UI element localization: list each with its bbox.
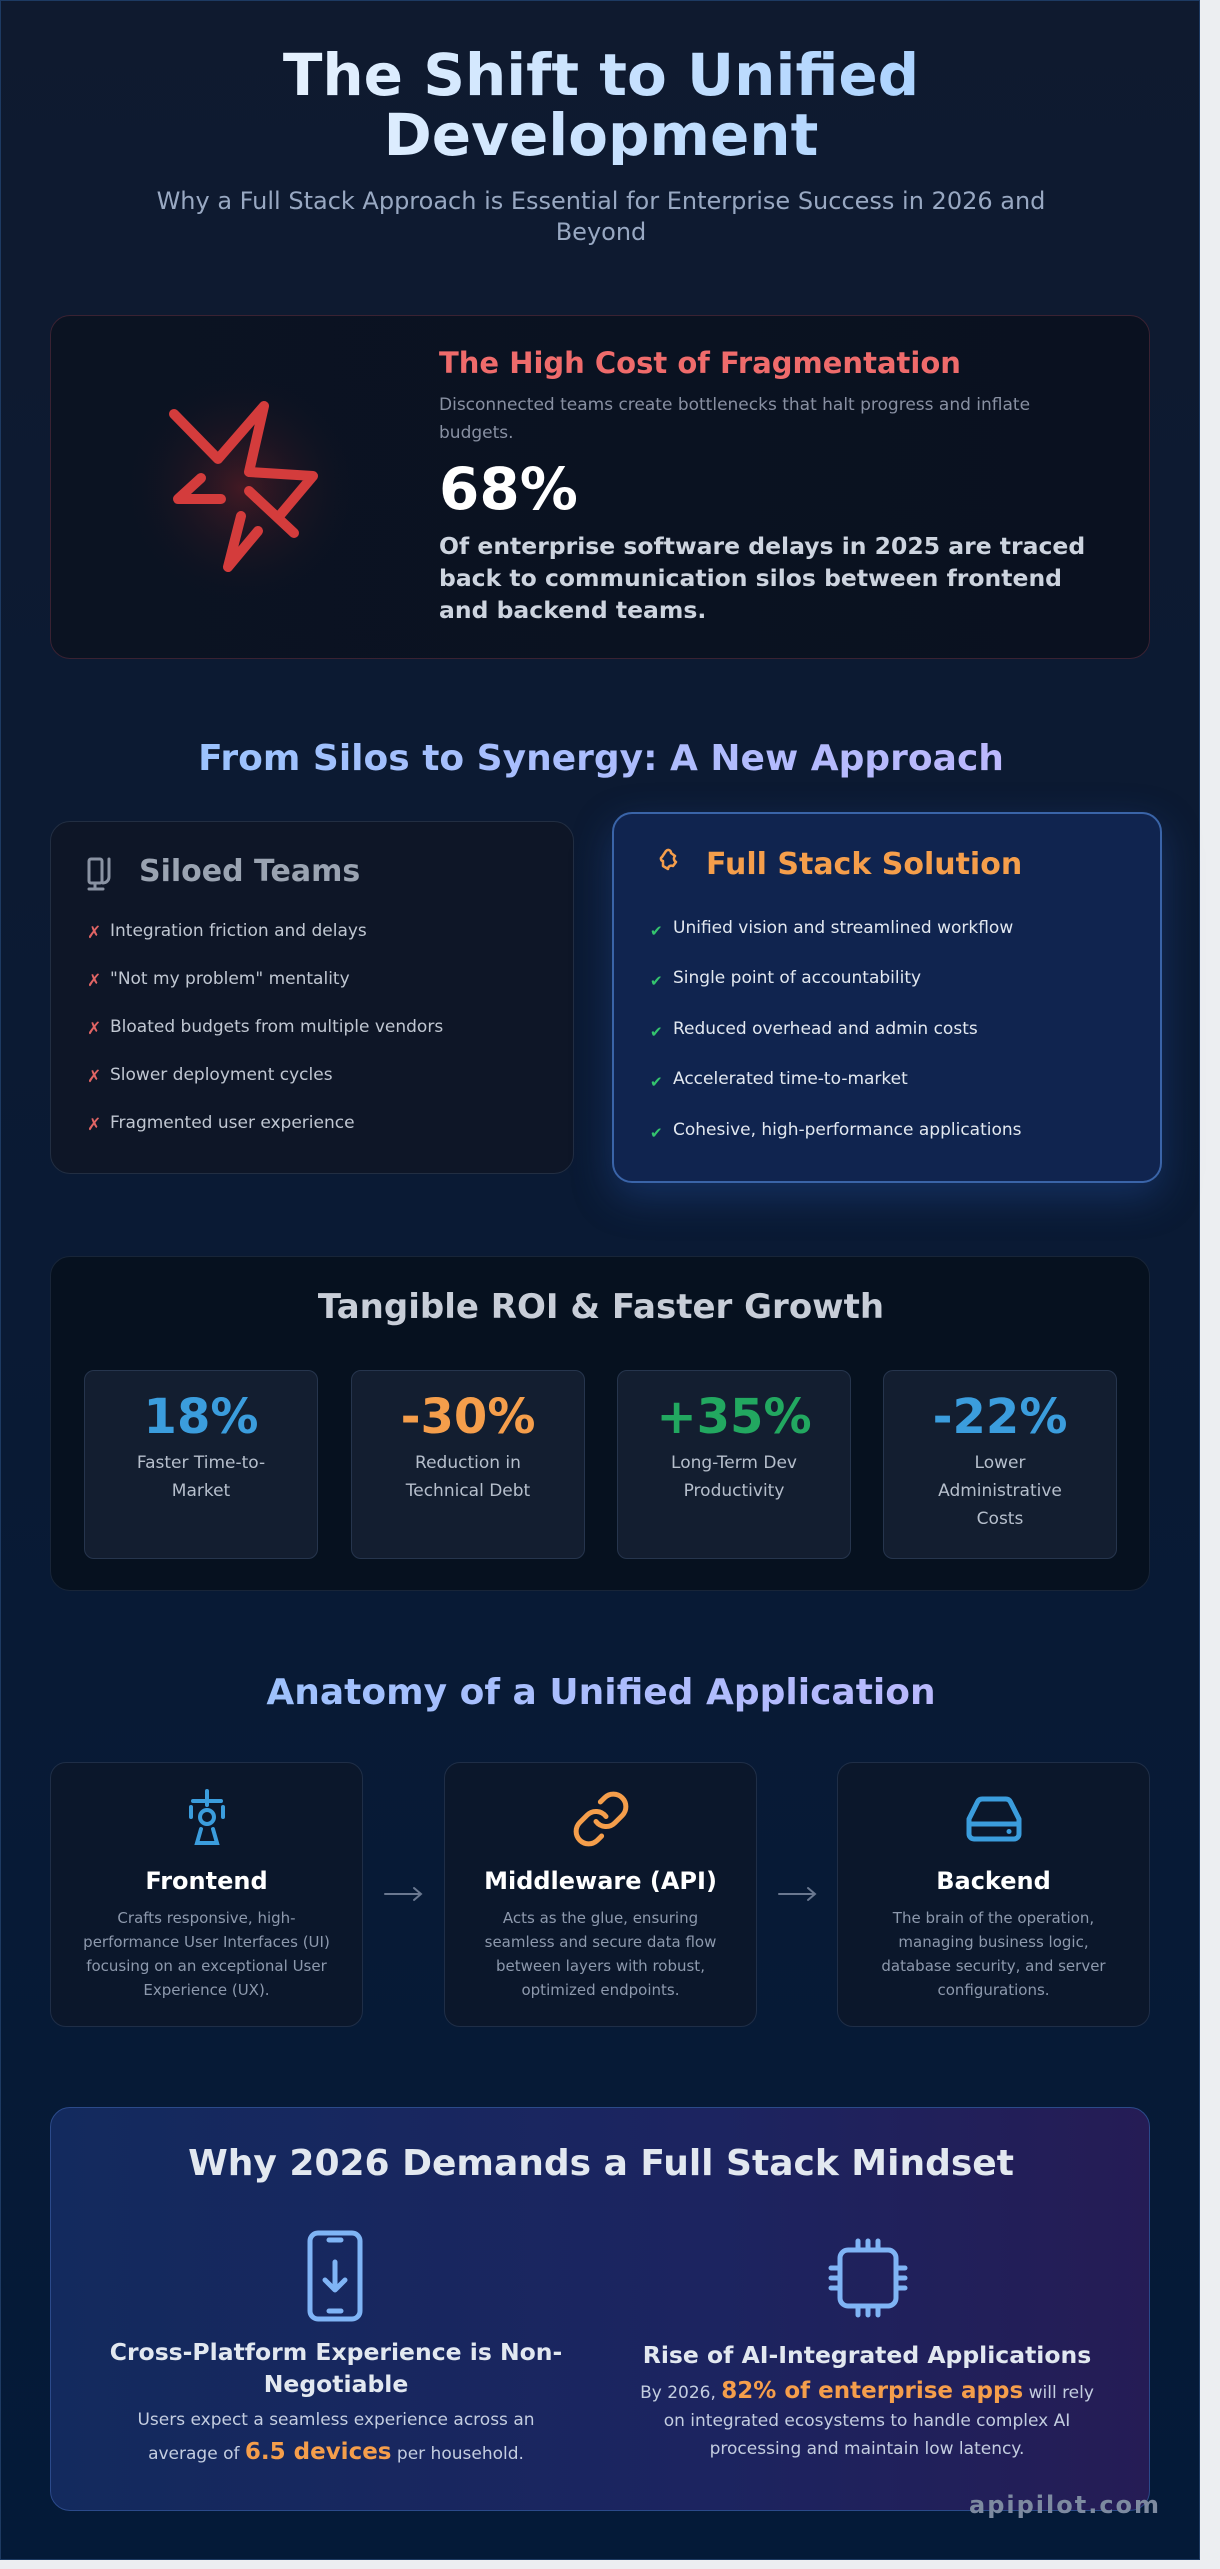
stat: -22%: [883, 1370, 1117, 1559]
text: AI: By 2026, 82% of enterprise apps will rely on integrated ecosystems to handle complex AI processing and maintain low latency.: [640, 2378, 1094, 2459]
list: ✗: [87, 971, 101, 991]
stat: -22%: Lower Administrative Costs: [938, 1453, 1062, 1529]
list: Accelerated time-to-market: [673, 1069, 908, 1089]
list: "Not my problem" mentality: [110, 969, 350, 989]
stat: 18%: [84, 1370, 318, 1559]
stat description: Of enterprise software delays in 2025 are traced back to communication silos between frontend and backend teams.: [439, 532, 1085, 624]
arrow: [778, 1887, 816, 1901]
title: Development: [384, 101, 818, 169]
text: cross-platform: Cross-Platform Experience is Non-: [110, 2338, 562, 2366]
stat: 18%: 18%: [144, 1389, 258, 1445]
text: cross-platform: [110, 2338, 562, 2465]
panel: ROI: [50, 1256, 1150, 1591]
icon: phone download: [308, 2230, 362, 2322]
stat: 68%: 68%: [439, 455, 578, 523]
title: [1, 45, 1201, 165]
icon: link: [574, 1792, 628, 1846]
icon: hard drive: [966, 1796, 1022, 1842]
text: cross-platform: Users expect a seamless experience across an average of 6.5 devices per household.: [137, 2410, 535, 2465]
list: ✗: [87, 923, 101, 943]
list: Slower deployment cycles: [110, 1065, 333, 1085]
title: The Shift to Unified: [283, 41, 919, 109]
arrow: [384, 1887, 422, 1901]
name: Middleware (API): [484, 1867, 717, 1895]
name: Backend: [936, 1867, 1051, 1895]
stat: -30%: Reduction in Technical Debt: [406, 1453, 530, 1501]
name: Frontend: [145, 1867, 268, 1895]
list: [650, 918, 1022, 1142]
stat: -30%: -30%: [401, 1389, 535, 1445]
section heading: anatomy: Anatomy of a Unified Application: [266, 1672, 936, 1713]
text: AI: Rise of AI-Integrated Applications: [643, 2341, 1091, 2369]
section heading: silos to synergy: [1, 736, 1201, 782]
list: Single point of accountability: [673, 968, 921, 988]
description: Acts as the glue, ensuring seamless and secure data flow between layers with robust, optimized endpoints.: [485, 1909, 716, 1999]
list: ✔: [650, 922, 663, 940]
text: cross-platform: Negotiable: [264, 2370, 408, 2398]
list: ✔: [650, 1124, 663, 1142]
heading: Siloed Teams: [139, 854, 360, 889]
stat: +35%: Long-Term Dev Productivity: [671, 1453, 797, 1501]
list: ✗: [87, 1067, 101, 1087]
subtitle: Why a Full Stack Approach is Essential for Enterprise Success in 2026 and Beyond: [157, 187, 1045, 246]
list: Cohesive, high-performance applications: [673, 1120, 1022, 1140]
stat: -22%: -22%: [933, 1389, 1067, 1445]
stat: 18%: Faster Time-to-Market: [137, 1453, 265, 1501]
list: ✔: [650, 1073, 663, 1091]
stat: +35%: [617, 1370, 851, 1559]
section heading: silos to synergy: From Silos to Synergy: A New Approach: [198, 738, 1004, 779]
card: frontend: [50, 1762, 363, 2027]
icon: cpu chip: [828, 2238, 908, 2318]
card: backend: [837, 1762, 1150, 2027]
list: ✔: [650, 972, 663, 990]
stat: -30%: [351, 1370, 585, 1559]
watermark: apipilot.com: [969, 2491, 1161, 2519]
list: Unified vision and streamlined workflow: [673, 918, 1013, 938]
card: middleware: [444, 1762, 757, 2027]
description: The brain of the operation, managing business logic, database security, and server configurations.: [881, 1909, 1106, 1999]
icon: puzzle: [660, 848, 678, 870]
list: Fragmented user experience: [110, 1113, 355, 1133]
heading: Full Stack Solution: [706, 847, 1022, 882]
section heading: anatomy: [1, 1670, 1201, 1716]
list: ✗: [87, 1019, 101, 1039]
panel: siloed teams: [50, 821, 574, 1174]
list: Bloated budgets from multiple vendors: [110, 1017, 443, 1037]
icon: broken lightning: [168, 401, 318, 572]
list: Integration friction and delays: [110, 921, 367, 941]
list: [87, 921, 443, 1135]
text: AI: [640, 2341, 1094, 2459]
stat: +35%: +35%: [656, 1389, 812, 1445]
heading: Why 2026 Demands a Full Stack Mindset: [188, 2143, 1014, 2184]
heading: ROI: Tangible ROI & Faster Growth: [318, 1287, 884, 1327]
list: Reduced overhead and admin costs: [673, 1019, 978, 1039]
description: Disconnected teams create bottlenecks that halt progress and inflate budgets.: [439, 395, 1030, 443]
icon: monitor: [88, 858, 110, 890]
heading: The High Cost of Fragmentation: [439, 346, 961, 380]
list: ✔: [650, 1023, 663, 1041]
panel: full stack solution: [612, 812, 1162, 1183]
icon: frontend: [189, 1789, 225, 1845]
panel: high cost of fragmentation: [50, 315, 1150, 659]
description: Crafts responsive, high-performance User Interfaces (UI) focusing on an exceptional User Experience (UX).: [83, 1909, 330, 1999]
list: ✗: [87, 1115, 101, 1135]
panel: why 2026: [50, 2107, 1150, 2511]
